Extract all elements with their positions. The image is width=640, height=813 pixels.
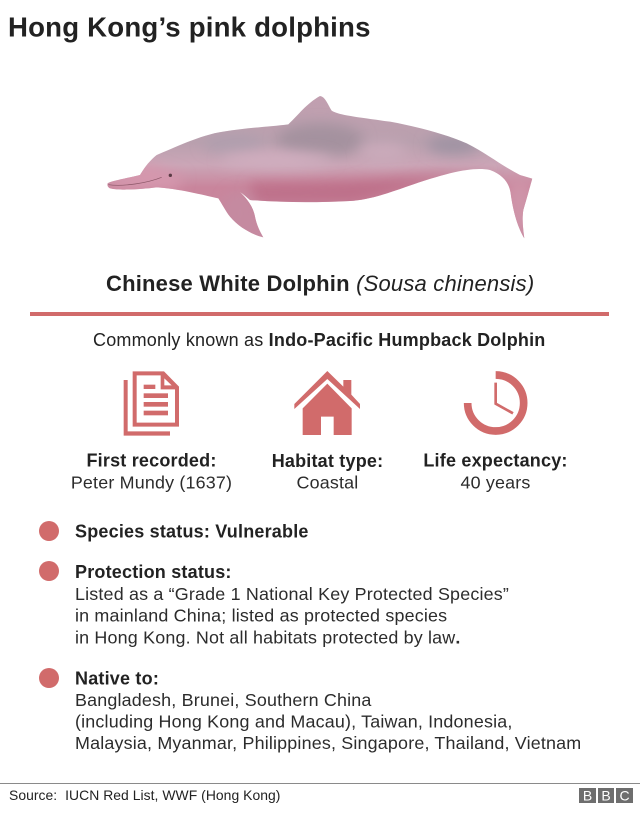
common name: Commonly known as Indo-Pacific Humpback Dolphin [93, 330, 546, 350]
logo: BBC [579, 788, 633, 804]
species name heading: Chinese White Dolphin (Sousa chinensis) [106, 271, 534, 296]
logo: BBC: B [583, 788, 592, 804]
fact: life expectancy: 40 years [460, 472, 531, 492]
bullet: protection status: in mainland China; listed as protected species [75, 606, 447, 626]
heading divider rule [30, 312, 609, 316]
fact: first recorded: Peter Mundy (1637) [71, 472, 232, 492]
fact: life expectancy [423, 450, 568, 492]
illustration: dolphin [107, 96, 532, 238]
source: Source: IUCN Red List, WWF (Hong Kong) [9, 787, 280, 803]
footer rule [0, 783, 640, 784]
bullet: species status: Species status: Vulnerable [75, 522, 309, 542]
bullet: native to [39, 668, 581, 753]
bullet: native to: Bangladesh, Brunei, Southern China [75, 690, 372, 710]
logo: BBC: B [601, 788, 611, 804]
fact: habitat type [272, 451, 383, 492]
fact: habitat type: Coastal [297, 472, 358, 492]
bullet: protection status: in Hong Kong. Not all habitats protected by law. [75, 628, 461, 648]
fact: life expectancy: Life expectancy: [423, 450, 568, 470]
logo: BBC: C [619, 788, 630, 804]
bullet: protection status: Protection status: [75, 562, 232, 582]
bullet: protection status: Listed as a “Grade 1 National Key Protected Species” [75, 584, 509, 604]
icon: documents [124, 371, 179, 436]
fact: first recorded: First recorded: [86, 450, 217, 470]
fact: habitat type: Habitat type: [272, 451, 383, 471]
icon: clock [468, 375, 524, 431]
icon: house [294, 371, 360, 435]
bullet: protection status [39, 561, 509, 648]
title: Hong Kong’s pink dolphins [8, 12, 371, 42]
bullet: native to: Malaysia, Myanmar, Philippines, Singapore, Thailand, Vietnam [75, 733, 581, 753]
fact: first recorded [71, 450, 232, 492]
bullet: native to: Native to: [75, 668, 159, 688]
bullet: native to: (including Hong Kong and Macau), Taiwan, Indonesia, [75, 712, 513, 732]
